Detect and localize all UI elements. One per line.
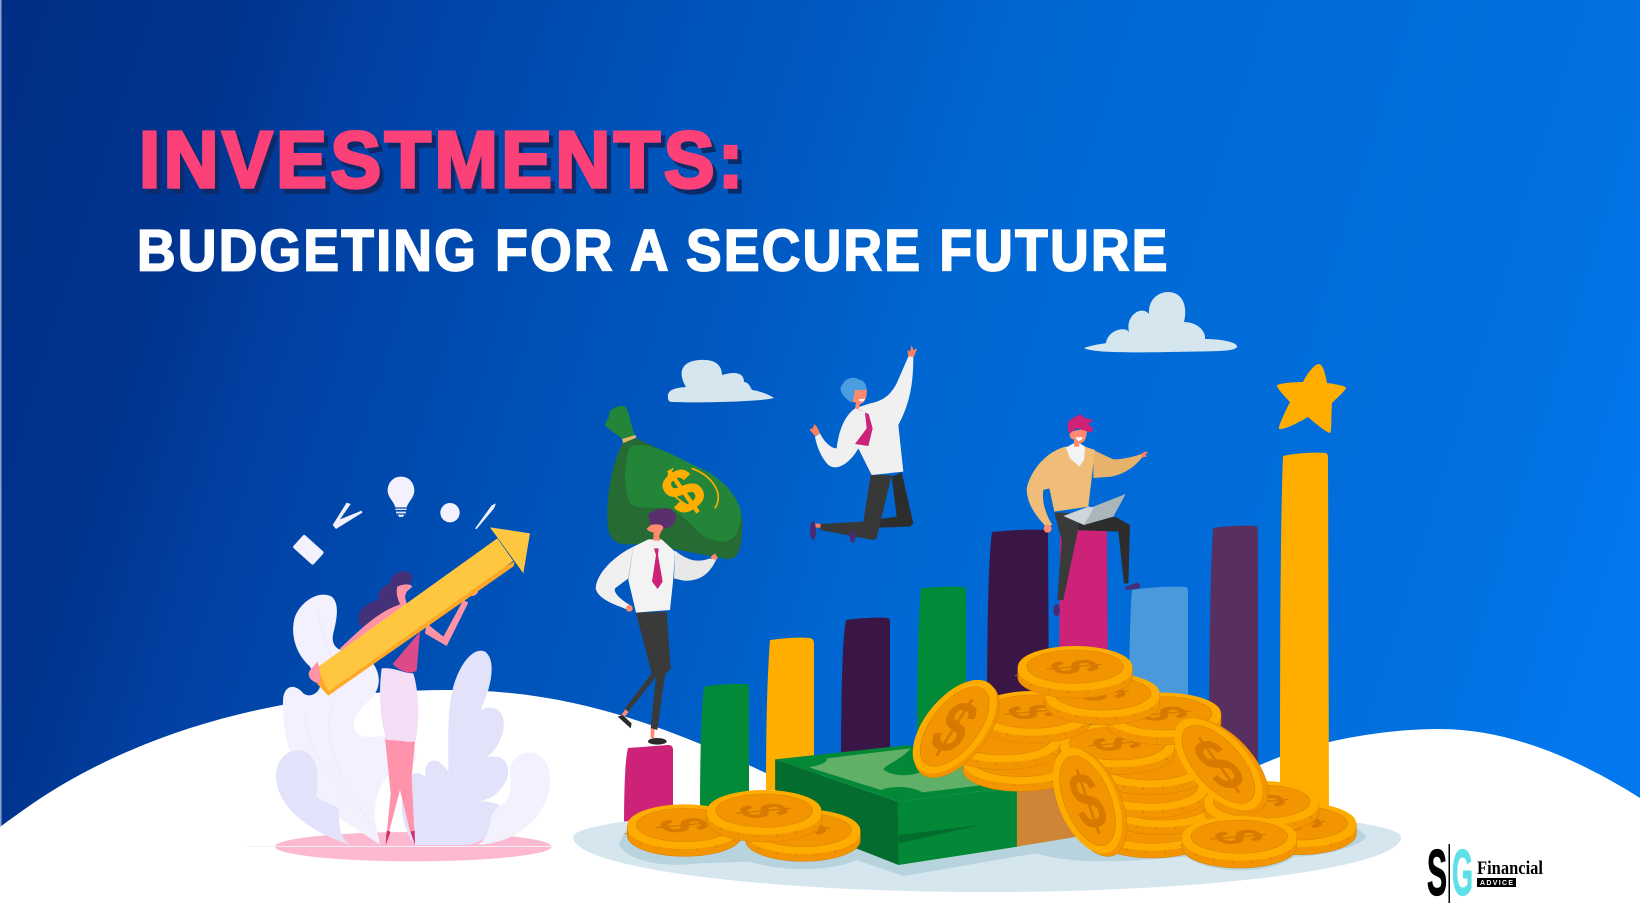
leaf: large back [283,595,416,845]
coin: $ [989,702,1073,722]
coin [1182,816,1296,868]
tie [652,548,663,589]
icon: eraser [292,534,324,565]
bar: yellow tallest [1280,453,1329,815]
ankles [621,709,655,738]
shoes [618,715,632,728]
cloud left [668,360,774,402]
coin [1242,803,1356,855]
sweater [1027,447,1095,527]
logo word Financial: Financial [1477,858,1543,879]
logo divider [1448,844,1450,903]
back leg [857,472,913,528]
shirt [815,357,913,475]
bills top outer [775,745,1018,802]
shoe upper [1125,583,1140,590]
leaf: small left [276,750,350,845]
logo: G [1452,836,1473,909]
coin [976,691,1090,743]
coin [627,804,742,856]
logo tag [1477,878,1516,887]
arm holding bag hand [711,553,718,562]
face [397,584,412,604]
raised hand [907,345,917,357]
bills front face [898,787,1018,865]
face [852,388,867,412]
star [1277,364,1346,433]
coin [1060,723,1175,775]
shoe lower [1053,604,1060,616]
arrow head [490,527,530,573]
illustration: man carrying money bag [596,406,742,745]
smile [1076,437,1083,441]
shoe back [850,531,856,543]
laptop screen [1084,494,1126,525]
coin: tilted left [893,672,1018,785]
shirt torso [628,539,675,613]
coin: tilted centre: $ [1058,754,1117,847]
coin: $ [759,820,844,840]
coin [963,739,1078,791]
coin: $ [1195,827,1280,847]
icon: stapler [333,503,362,529]
bar: dark purple [841,618,890,770]
bulb glass [388,477,414,507]
front leg [1054,512,1078,600]
coin top: $ [1031,657,1116,677]
front shoe [648,738,667,745]
coin [707,790,821,842]
title: INVESTMENTS: [139,114,743,204]
coin [1105,783,1219,835]
back arm [340,603,413,663]
coin: $ [1120,704,1204,723]
coin pile: main stacks [946,646,1356,868]
subtitle: BUDGETING FOR A SECURE FUTURE [137,218,1167,283]
bag arcs [668,468,718,508]
bag dollar sign: $ [649,453,717,530]
hand on bar [1044,525,1052,533]
hand on hip [626,605,633,612]
bag neck [605,406,635,440]
face [1070,428,1087,447]
bar chart [624,453,1329,830]
ground shadow ellipse [573,805,1401,892]
bills edge crease [864,813,981,843]
white hills [0,690,1640,924]
coin [1045,673,1160,725]
bar: dark purple tall [987,530,1049,720]
shirt arm left [596,547,633,610]
icon: coin [440,503,460,522]
pointing hand [1141,451,1148,457]
smile [858,399,865,402]
bag tie [622,435,636,443]
front leg [820,475,892,540]
ankle [815,523,821,528]
left hand [809,424,820,436]
bar: light blue [1129,587,1188,730]
floor line [247,846,552,847]
logo [1427,836,1543,909]
head [647,517,664,541]
pants [625,612,671,730]
illustration: jumping man [809,345,917,543]
back leg [1067,513,1130,583]
arrow [317,527,530,696]
top [393,632,420,673]
illustration: woman with arrow [247,477,552,861]
legs [385,738,415,845]
coin: $ [1074,734,1158,753]
arrow shaft shadow [317,562,514,696]
coin: $ [976,750,1061,770]
bar: green tall [917,587,966,760]
coin top [1018,646,1132,698]
coin: tilted right [1156,709,1286,822]
raised arm [425,600,468,646]
leaf: large right [402,651,508,845]
bills side face [775,759,898,865]
icon: pen [475,503,496,529]
ground contact shadows [619,817,1366,876]
bills top light [809,748,1013,792]
bag body [607,438,742,559]
bar: green short [700,684,749,815]
cloud right [1084,292,1237,352]
coin: tilted centre [1040,743,1140,861]
coin [1204,781,1319,833]
hair [1067,414,1093,433]
shirt arm right [674,551,716,581]
coin: tilted left: $ [916,684,994,770]
illustration: man with laptop [1027,414,1148,616]
coin: $ [1059,684,1143,703]
coin [1095,806,1209,858]
leaf: small right [478,752,550,845]
coin: $ [1255,814,1340,833]
icon: light bulb [388,477,414,517]
bar: plum [1209,526,1258,770]
shoes [386,831,415,845]
logo: S [1427,836,1447,909]
skirt [380,668,418,742]
laptop keyboard [1063,507,1094,525]
arrow shaft [317,538,513,692]
logo word Advice: ADVICE [1480,880,1513,887]
coin: $ [1106,777,1190,797]
hand left [309,662,321,684]
bar: yellow [766,638,814,790]
coin [946,718,1060,770]
banknote stack [775,745,1098,865]
shoe front [810,521,816,540]
sweater arm [1093,450,1143,478]
coin pile: front left [627,790,860,861]
coin: $ [641,815,725,835]
coin [1093,743,1207,795]
bulb base [395,509,407,517]
bar: magenta tall [1059,528,1108,700]
hair [841,378,866,403]
money illustration [619,646,1366,876]
coin [1106,693,1221,745]
tie [855,413,873,446]
hair [648,508,676,529]
coin: $ [1218,792,1302,812]
coin: tilted right: $ [1177,722,1260,807]
coin [746,809,860,861]
hair [358,571,412,628]
coin: $ [720,801,805,821]
bar: magenta short [624,745,673,830]
pink floor ellipse [275,832,552,861]
coin [1093,766,1207,818]
coin: $ [1108,817,1193,837]
bills paper band [1017,763,1098,847]
hand right [465,584,478,596]
bag highlight [625,445,741,542]
collar [1066,443,1085,467]
